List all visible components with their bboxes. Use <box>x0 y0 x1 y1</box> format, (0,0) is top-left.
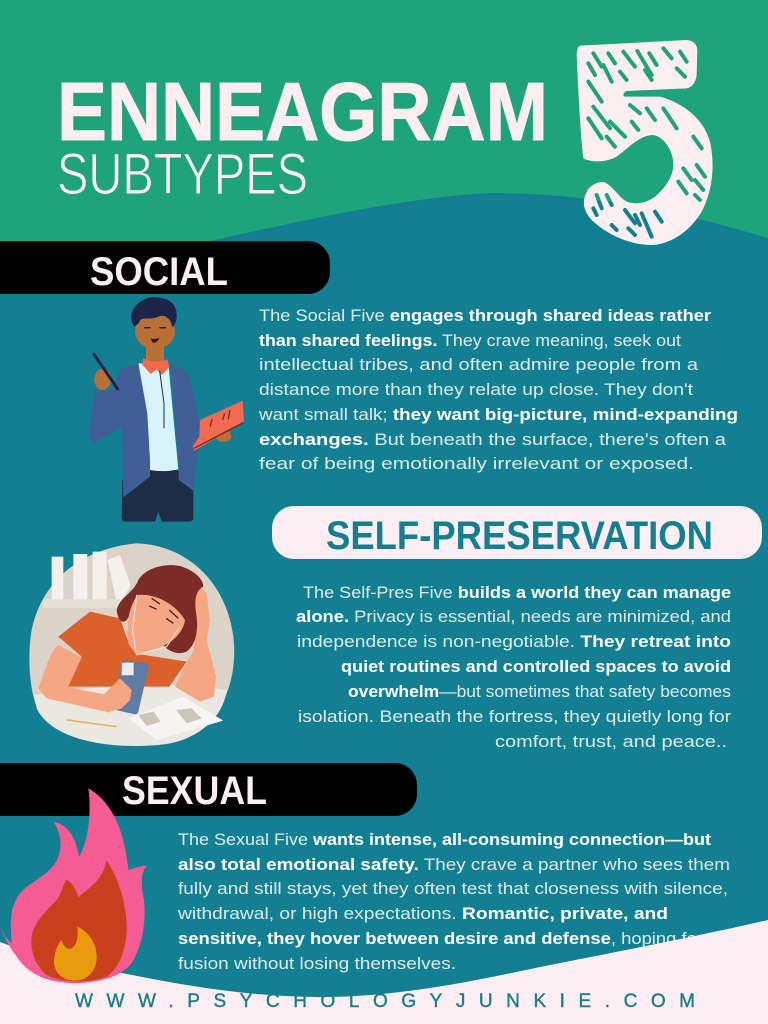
footer url: WWW.PSYCHOLOGYJUNKIE.COM <box>75 991 695 1012</box>
icon: flame <box>0 788 147 983</box>
heading: social <box>0 241 330 294</box>
title: ENNEAGRAM: ENNEAGRAM <box>57 65 548 158</box>
mouth <box>151 338 159 343</box>
pencil <box>67 720 117 727</box>
icon: man with pen and book <box>88 297 244 522</box>
hair <box>131 297 177 327</box>
pen <box>93 353 118 390</box>
body text: social: exchanges. But beneath the surface, there's often a <box>259 430 727 449</box>
shelf <box>43 599 123 608</box>
right arm <box>175 583 216 702</box>
flame core orange <box>54 927 97 981</box>
body text: social: want small talk; they want big-picture, mind-expanding <box>258 405 738 424</box>
face <box>128 595 185 649</box>
body text: sexual <box>177 830 730 973</box>
body text: sexual: fusion without losing themselves. <box>178 954 456 973</box>
body text: self-preservation: quiet routines and controlled spaces to avoid <box>341 657 731 676</box>
collar <box>142 358 169 375</box>
icon: sketched number 5 <box>576 40 713 245</box>
neck <box>146 343 164 363</box>
earphone wire <box>133 595 180 655</box>
self-preservation pill <box>272 506 762 559</box>
heading: self-preservation <box>272 506 762 559</box>
body text: social: The Social Five engages through shared ideas rather <box>259 306 711 325</box>
open paper <box>128 697 223 740</box>
self-preservation label: SELF-PRESERVATION <box>326 514 713 558</box>
brows and eyes <box>149 598 178 623</box>
hand on phone <box>100 678 132 712</box>
body text: sexual: also total emotional safety. They crave a partner who sees them <box>178 855 730 874</box>
book hand <box>215 430 231 442</box>
body text: self-preservation: independence is non-negotiable. They retreat into <box>297 632 731 651</box>
shirt <box>138 363 178 471</box>
hair back <box>117 565 203 653</box>
sexual pill <box>0 763 417 816</box>
body text: self-preservation: isolation. Beneath the fortress, they quietly long for <box>298 707 731 726</box>
trousers <box>122 470 193 522</box>
face <box>135 314 175 349</box>
books <box>52 552 131 599</box>
body text: self-preservation <box>296 583 731 751</box>
flame inner red <box>31 860 127 981</box>
jacket right <box>171 363 201 491</box>
table <box>34 685 227 746</box>
footer wave <box>0 920 768 1024</box>
body text: self-preservation: overwhelm—but sometimes that safety becomes <box>348 682 731 701</box>
title <box>57 65 548 207</box>
title: SUBTYPES: SUBTYPES <box>57 142 308 207</box>
book <box>193 401 244 451</box>
phone <box>113 660 149 714</box>
hand with pen <box>94 369 111 390</box>
body text: sexual: fully and still stays, yet they often test that closeness with silence, <box>178 879 728 898</box>
body text: self-preservation: alone. Privacy is essential, needs are minimized, and <box>296 607 731 626</box>
body text: sexual: The Sexual Five wants intense, all-consuming connection—but <box>178 830 711 849</box>
body text: self-preservation: The Self-Pres Five builds a world they can manage <box>303 583 731 602</box>
social pill <box>0 241 330 294</box>
heading: sexual <box>0 763 417 816</box>
body text: social: distance more than they relate up close. They don't <box>259 380 693 399</box>
icon: woman with phone and earbuds <box>29 543 234 746</box>
sexual label: SEXUAL <box>122 769 267 813</box>
body text: social: than shared feelings. They crave meaning, seek out <box>259 331 681 350</box>
social label: SOCIAL <box>90 250 228 294</box>
body text: self-preservation: comfort, trust, and peace.. <box>495 732 727 751</box>
body text: sexual: withdrawal, or high expectations. Romantic, private, and <box>177 904 668 923</box>
neck <box>127 630 157 655</box>
placket <box>160 371 164 428</box>
body text: social <box>258 306 738 473</box>
body text: sexual: sensitive, they hover between desire and defense , hoping for <box>178 929 703 948</box>
eyes <box>144 326 166 330</box>
body text: social: fear of being emotionally irrelevant or exposed. <box>259 454 694 473</box>
paper boxes <box>138 708 202 726</box>
beige blob <box>29 543 234 746</box>
flame outer <box>0 788 147 983</box>
shirt <box>58 612 187 687</box>
left arm <box>38 645 117 713</box>
body text: social: intellectual tribes, and often admire people from a <box>259 355 699 374</box>
phone screen <box>122 663 134 675</box>
jacket left <box>88 363 150 497</box>
